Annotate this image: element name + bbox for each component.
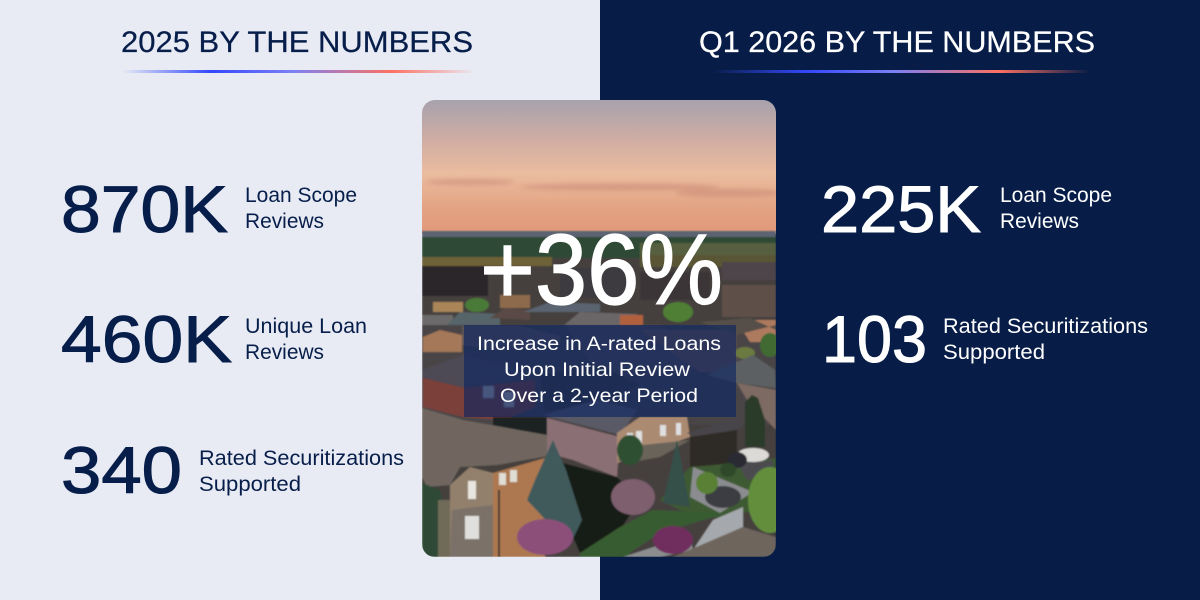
callout description bbox=[477, 333, 721, 407]
stat: 340 rated securitizations supported: Supported bbox=[199, 473, 301, 496]
big number: +36% bbox=[480, 214, 723, 326]
panel: Q1 2026 numbers bbox=[699, 26, 1148, 376]
dark garden bbox=[563, 463, 630, 553]
stat: 870K loan scope reviews: 870K bbox=[61, 172, 228, 246]
stat: 225K loan scope reviews: 225K bbox=[821, 172, 981, 246]
stat: 460K unique loan reviews bbox=[61, 302, 367, 376]
stat: 870K loan scope reviews: Loan Scope bbox=[245, 184, 357, 207]
stat: 870K loan scope reviews: Reviews bbox=[245, 210, 324, 233]
stat: 460K unique loan reviews: Unique Loan bbox=[245, 315, 367, 338]
callout description: Over a 2-year Period bbox=[500, 385, 698, 407]
callout description: Upon Initial Review bbox=[504, 359, 691, 381]
stat: 340 rated securitizations supported bbox=[61, 433, 404, 507]
front trees bbox=[527, 440, 582, 545]
red brick house bbox=[422, 356, 464, 386]
heading: 2025 by the numbers: 2025 BY THE NUMBERS bbox=[121, 26, 473, 59]
gradient rule: left heading bbox=[122, 70, 476, 73]
stat: 460K unique loan reviews: 460K bbox=[61, 302, 232, 376]
front-left large house bbox=[422, 408, 548, 488]
right-hand house bbox=[707, 355, 776, 388]
stat: 103 rated securitizations supported: Supported bbox=[943, 341, 1045, 364]
stat: 870K loan scope reviews bbox=[61, 172, 357, 246]
overlay: translucent navy text box bbox=[464, 325, 736, 417]
stat: 103 rated securitizations supported bbox=[822, 302, 1148, 376]
driveway and cars bbox=[660, 458, 776, 520]
stat: 460K unique loan reviews: Reviews bbox=[245, 341, 324, 364]
middle front house bbox=[543, 400, 637, 435]
heading: Q1 2026 by the numbers: Q1 2026 BY THE NUMBERS bbox=[699, 26, 1095, 59]
callout description: Increase in A-rated Loans bbox=[477, 333, 721, 355]
stat: 225K loan scope reviews: Loan Scope bbox=[1000, 184, 1112, 207]
lawn bbox=[580, 510, 704, 554]
panel: left background bbox=[0, 0, 600, 600]
stat: 103 rated securitizations supported: 103 bbox=[822, 302, 927, 376]
panel: right background bbox=[600, 0, 1200, 600]
gradient rule: right heading bbox=[712, 70, 1090, 73]
stat: 225K loan scope reviews: Reviews bbox=[1000, 210, 1079, 233]
stat: 225K loan scope reviews bbox=[821, 172, 1112, 246]
stat: 340 rated securitizations supported: Rated Securitizations bbox=[199, 447, 404, 470]
upper rows of roofs bbox=[422, 266, 488, 296]
middle band of houses bbox=[422, 325, 776, 425]
panel: 2025 numbers bbox=[61, 26, 476, 507]
callout: +36% increase bbox=[477, 214, 723, 407]
photo: suburban neighbourhood at sunset bbox=[422, 100, 792, 557]
stat: 103 rated securitizations supported: Rated Securitizations bbox=[943, 315, 1148, 338]
stat: 340 rated securitizations supported: 340 bbox=[61, 433, 182, 507]
